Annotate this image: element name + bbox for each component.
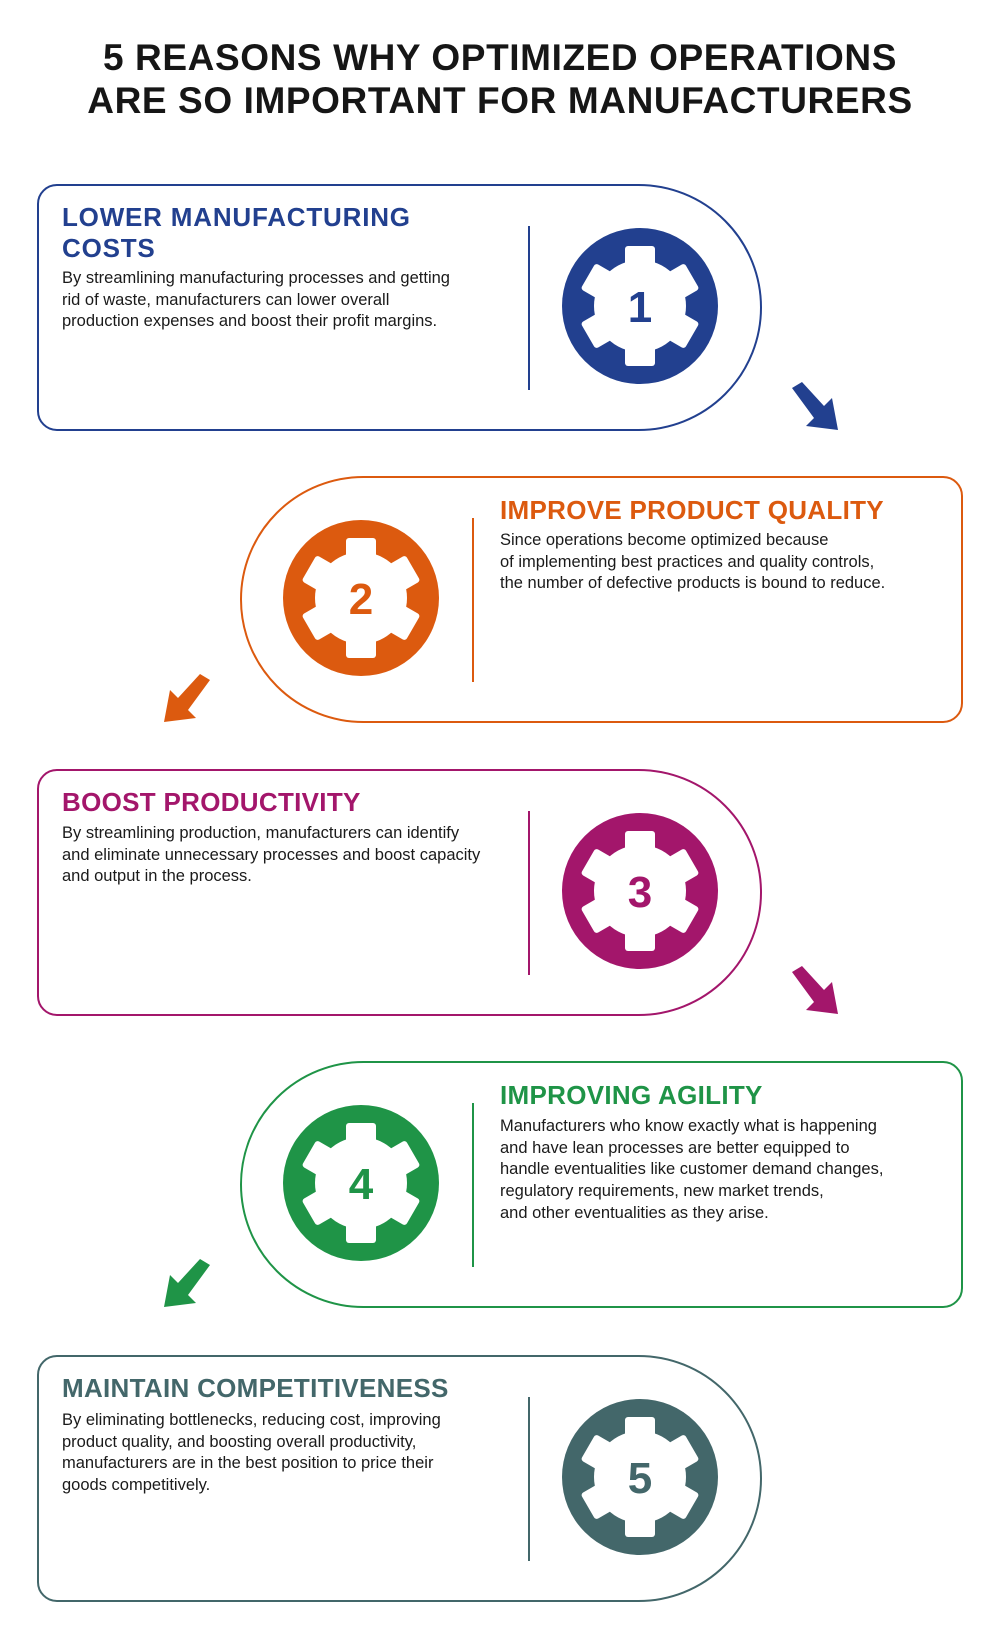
panel: 2 improve product quality: [240, 476, 963, 723]
text 3: By streamlining production, manufacturers can identify and eliminate unnecessary processes and boost capacity and output in the process.: [62, 824, 480, 885]
icon: gear 1: 1: [628, 283, 652, 332]
text 4: regulatory requirements, new market trends,: [500, 1182, 824, 1200]
heading 4: IMPROVING AGILITY: [500, 1080, 763, 1110]
heading 1: LOWER MANUFACTURING: [62, 202, 411, 232]
arrow 4: [164, 1259, 210, 1307]
text 4: Manufacturers who know exactly what is happening: [500, 1117, 877, 1135]
icon: gear 4: [283, 1105, 439, 1261]
icon: gear 1: [562, 228, 718, 384]
heading 2: IMPROVE PRODUCT QUALITY: [500, 495, 884, 525]
heading 1: [62, 202, 411, 263]
text 4: and have lean processes are better equipped to: [500, 1139, 850, 1157]
icon: gear 3: [562, 813, 718, 969]
icon: gear 4: 4: [349, 1160, 374, 1209]
title: 5 REASONS WHY OPTIMIZED OPERATIONS: [103, 37, 897, 78]
divider line 2: [472, 518, 474, 682]
arrow 2: [164, 674, 210, 722]
heading 1: COSTS: [62, 233, 156, 263]
text 4: handle eventualities like customer demand changes,: [500, 1160, 883, 1178]
arrow 3: [792, 966, 838, 1014]
text 2: the number of defective products is bound to reduce.: [500, 574, 885, 592]
divider line 4: [472, 1103, 474, 1267]
icon: gear 3: 3: [628, 868, 652, 917]
icon: gear 5: 5: [628, 1454, 652, 1503]
icon: gear 2: [283, 520, 439, 676]
divider line 3: [528, 811, 530, 975]
text 1: By streamlining manufacturing processes and getting rid of waste, manufacturers can lower overall production expenses and boost their profit margins.: [62, 269, 450, 330]
icon: gear 2: 2: [349, 575, 373, 624]
divider line 1: [528, 226, 530, 390]
text 2: Since operations become optimized because: [500, 531, 828, 549]
icon: gear 5: [562, 1399, 718, 1555]
title: ARE SO IMPORTANT FOR MANUFACTURERS: [87, 80, 913, 121]
panel: 4 improving agility: [240, 1061, 963, 1308]
panel: 5 maintain competitiveness: [37, 1355, 762, 1602]
arrow 1: [792, 382, 838, 430]
panel: 3 boost productivity: [37, 769, 762, 1016]
text 2: of implementing best practices and quality controls,: [500, 553, 874, 571]
panel: 1 lower manufacturing costs: [37, 184, 762, 431]
title: [87, 37, 913, 121]
text 4: [500, 1117, 883, 1222]
text 4: and other eventualities as they arise.: [500, 1204, 769, 1222]
text 2: [500, 531, 885, 592]
heading 3: BOOST PRODUCTIVITY: [62, 787, 361, 817]
heading 5: MAINTAIN COMPETITIVENESS: [62, 1373, 449, 1403]
divider line 5: [528, 1397, 530, 1561]
text 5: By eliminating bottlenecks, reducing cost, improving product quality, and boosting overall productivity, manufacturers are in the best position to price their goods competitively.: [62, 1411, 441, 1494]
